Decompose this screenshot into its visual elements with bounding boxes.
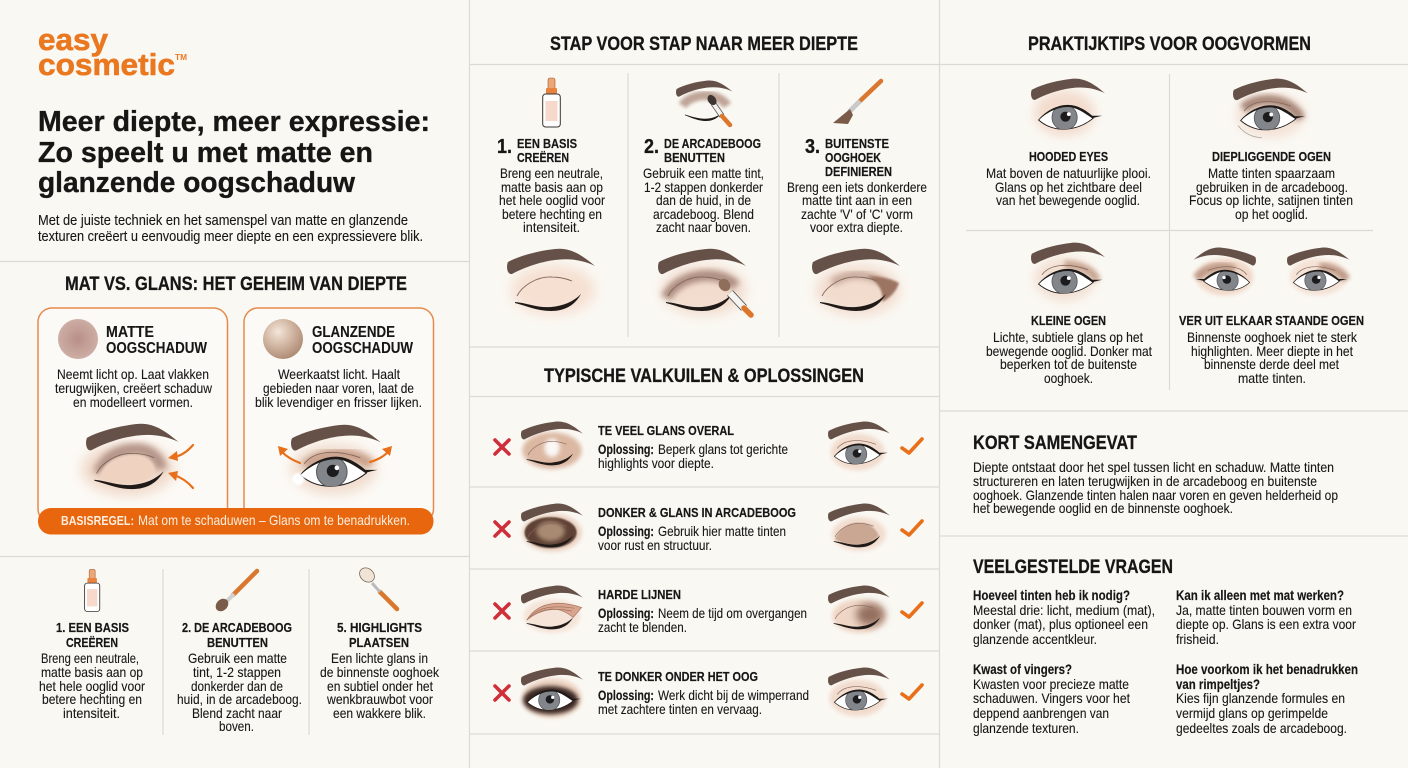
step heading: 1. EEN BASIS (56, 620, 129, 635)
faq: alleen mat (1176, 588, 1356, 647)
step: arcadeboog (177, 571, 302, 734)
card text: gloss (255, 366, 422, 410)
row text: Oplossing: (598, 524, 654, 539)
step text: de binnenste ooghoek (320, 664, 440, 680)
tip text: hooded (986, 149, 1151, 208)
eye: soft blend (828, 586, 890, 633)
row text: Oplossing: (598, 606, 654, 621)
logo: cosmetic (38, 47, 175, 82)
eye: wide set left (1194, 248, 1256, 295)
heading: valkuilen: TYPISCHE VALKUILEN & OPLOSSINGEN (544, 365, 864, 387)
tip text: deep set: op het ooglid. (1235, 206, 1308, 222)
cross (495, 686, 509, 700)
logo (38, 22, 187, 82)
step 1 text: intensiteit. (523, 219, 580, 235)
panel: kort samengevat (973, 432, 1338, 516)
faq: tinten: glanzende accentkleur. (973, 631, 1097, 647)
step 3 (787, 81, 927, 315)
logo: TM (175, 53, 187, 62)
step text (320, 650, 440, 721)
arrow: gloss right (370, 446, 392, 462)
step text: huid, in de arcadeboog. (177, 691, 302, 707)
card text: gloss: blik levendiger en frisser lijken. (255, 394, 422, 410)
panel: stap voor stap (497, 33, 927, 337)
card text: matte (55, 366, 213, 410)
step 2 heading: BENUTTEN (664, 150, 725, 165)
tip: ver uit elkaar (1179, 248, 1364, 386)
eye: too much gloss (521, 422, 583, 469)
eye: small (1031, 243, 1105, 301)
faq: alleen mat: frisheid. (1176, 631, 1219, 647)
row text: voor rust en structuur. (598, 537, 712, 553)
arrow: matte lower (168, 471, 193, 488)
step text: boven. (219, 718, 254, 734)
step text: betere hechting en (42, 691, 142, 707)
tip text: hooded: van het bewegende ooglid. (996, 192, 1140, 208)
card: glanzende oogschaduw (244, 308, 434, 523)
tip text: deep set: Matte tinten spaarzaam (1208, 165, 1335, 181)
tip text: small: beperken tot de buitenste (1000, 356, 1137, 372)
card heading: gloss: GLANZENDE (312, 324, 395, 341)
eye: matte beige (828, 504, 890, 551)
step heading: BENUTTEN (207, 635, 268, 650)
step 2 text: arcadeboog. Blend (653, 206, 754, 222)
card text: gloss: gebieden naar voren, laat de (263, 380, 414, 396)
summary text: Diepte ontstaat door het spel tussen licht en schaduw. Matte tinten (973, 459, 1334, 475)
card: matte oogschaduw (38, 308, 228, 523)
step heading: CREËREN (66, 635, 118, 650)
faq: alleen mat: Kan ik alleen met mat werken? (1176, 588, 1344, 603)
step: basis (39, 569, 145, 721)
tip text: small: Lichte, subtiele glans op het (993, 329, 1143, 345)
illustration: base eye (507, 249, 595, 315)
step 3 heading: OOGHOEK (825, 150, 881, 165)
summary text (973, 459, 1338, 516)
step 3 text (787, 179, 927, 235)
faq: kwast: Kwast of vingers? (973, 662, 1072, 677)
summary text: ooghoek. Glanzende tinten halen naar voren en geven helderheid op (973, 487, 1338, 503)
faq: kwast: schaduwen. Vingers voor het (973, 690, 1130, 706)
step 1 text (499, 165, 605, 235)
step 3 text: Breng een iets donkerdere (787, 179, 927, 195)
title: Zo speelt u met matte en (38, 137, 373, 169)
faq: kwast: Kwasten voor precieze matte (973, 676, 1129, 692)
step heading (337, 620, 422, 650)
row: te veel glans (495, 422, 922, 471)
faq: rimpeltjes: vermijd glans op gerimpelde (1176, 705, 1328, 721)
step heading (56, 620, 129, 650)
faq: rimpeltjes: gedeeltes zoals de arcadeboog. (1176, 720, 1347, 736)
eye: corrected gloss (828, 422, 890, 470)
eye: hooded (1031, 79, 1105, 136)
card heading: gloss: OOGSCHADUW (312, 340, 413, 357)
step heading: PLAATSEN (349, 635, 409, 650)
step 1 heading: 1. (497, 136, 512, 158)
card heading: matte (106, 324, 207, 357)
eye: too dark under (521, 668, 583, 718)
step 2 text: 1-2 stappen donkerder (644, 179, 763, 195)
tip text: wide set: highlighten. Meer diepte in het (1191, 343, 1353, 359)
step 2 heading (644, 136, 761, 165)
tip: kleine ogen (986, 243, 1152, 386)
card text: matte: Neemt licht op. Laat vlakken (57, 366, 209, 382)
arrow: gloss left (278, 446, 300, 463)
faq: tinten: Hoeveel tinten heb ik nodig? (973, 588, 1130, 603)
check (902, 685, 922, 699)
row text (598, 505, 796, 553)
row: donker en glans (495, 504, 922, 553)
row text: Beperk glans tot gerichte (658, 441, 788, 457)
tip text: hooded: Mat boven de natuurlijke plooi. (986, 165, 1151, 181)
panel: mat vs glans (38, 273, 434, 534)
row text (598, 587, 807, 635)
rule bar: BASISREGEL: (61, 513, 134, 528)
step text: donkerder dan de (191, 678, 283, 694)
step text: en subtiel onder het (327, 678, 433, 694)
card heading: matte: OOGSCHADUW (106, 340, 207, 357)
illustration: matte eye (82, 424, 193, 495)
icon: bottle (543, 78, 560, 127)
tip text: wide set: binnenste derde deel met (1204, 356, 1339, 372)
card heading: gloss (312, 324, 413, 357)
step 3 heading (805, 136, 892, 179)
icon: fan brush (357, 565, 397, 609)
intro text: texturen creëert u eenvoudig meer diepte en een expressievere blik. (38, 228, 423, 245)
cross (495, 604, 509, 618)
step 3 heading: 3. (805, 136, 820, 158)
panel: valkuilen (495, 365, 922, 718)
title: glanzende oogschaduw (38, 167, 356, 199)
title: Meer diepte, meer expressie: (38, 106, 430, 138)
step heading: 5. HIGHLIGHTS (337, 620, 422, 635)
step 1 heading: CREËREN (517, 150, 569, 165)
row text: Oplossing: (598, 688, 654, 703)
faq: alleen mat: diepte op. Glans is een extra voor (1176, 616, 1356, 632)
intro text: Met de juiste techniek en het samenspel van matte en glanzende (38, 212, 408, 229)
eye: soft under (828, 668, 890, 716)
row text: highlights voor diepte. (598, 455, 714, 471)
tip: diepliggend (1189, 79, 1353, 222)
row text: Neem de tijd om overgangen (658, 605, 807, 621)
step: highlights (320, 565, 440, 721)
step text (177, 650, 302, 734)
row text: zacht te blenden. (598, 619, 687, 635)
summary text: structureren en laten terugwijken in de arcadeboog en buitenste (973, 473, 1317, 489)
tip text: deep set: DIEPLIGGENDE OGEN (1212, 149, 1331, 164)
arrow: matte upper (168, 445, 193, 461)
row text: Werk dicht bij de wimperrand (658, 687, 809, 703)
illustration: crease eye (658, 249, 751, 315)
step 2 text: Gebruik een matte tint, (643, 165, 764, 181)
heading: mat vs glans: MAT VS. GLANS: HET GEHEIM VAN DIEPTE (65, 273, 407, 295)
tip text: deep set: gebruiken in de arcadeboog. (1196, 179, 1348, 195)
faq: tinten: Meestal drie: licht, medium (mat), (973, 602, 1155, 618)
card heading: matte: MATTE (106, 324, 154, 341)
check (902, 521, 922, 535)
step 1 heading: EEN BASIS (517, 136, 577, 151)
row text: Gebruik hier matte tinten (658, 523, 786, 539)
step text: een wakkere blik. (333, 705, 426, 721)
step text: matte basis aan op (41, 664, 143, 680)
tip text: deep set: Focus op lichte, satijnen tinten (1189, 192, 1353, 208)
step text: Blend zacht naar (192, 705, 282, 721)
row text: DONKER & GLANS IN ARCADEBOOG (598, 505, 796, 520)
tip text: wide set: matte tinten. (1238, 370, 1306, 386)
step 3 text: matte tint aan in een (802, 192, 912, 208)
row text: HARDE LIJNEN (598, 587, 681, 602)
icon: eye with applicator (676, 80, 732, 125)
cross (495, 440, 509, 454)
row text: met zachtere tinten en vervaag. (598, 701, 762, 717)
rule bar: Mat om te schaduwen – Glans om te benadrukken. (138, 512, 410, 528)
step 3 text: voor extra diepte. (810, 219, 903, 235)
step text: het hele ooglid voor (39, 678, 145, 694)
step 2 heading: 2. (644, 136, 659, 158)
illustration: outer V eye (812, 249, 900, 315)
step text: Breng een neutrale, (41, 650, 139, 666)
icon: bottle (85, 569, 100, 612)
row text (598, 423, 788, 471)
faq: kwast: deppend aanbrengen van (973, 705, 1109, 721)
faq: alleen mat: Ja, matte tinten bouwen vorm en (1176, 602, 1352, 618)
faq: tinten: donker (mat), plus optioneel een (973, 616, 1148, 632)
step 1 text: matte basis aan op (501, 179, 603, 195)
step 1 text: Breng een neutrale, (500, 165, 603, 181)
tip text: wide set: VER UIT ELKAAR STAANDE OGEN (1179, 313, 1364, 328)
tip text: wide set: Binnenste ooghoek niet te sterk (1187, 329, 1358, 345)
step 3 heading: BUITENSTE (825, 136, 889, 151)
faq: rimpeltjes: Kies fijn glanzende formules en (1176, 690, 1345, 706)
illustration: gloss eye (278, 425, 392, 494)
eye: wide set right (1287, 248, 1349, 295)
tip text: deep set (1189, 149, 1353, 222)
step 1 (497, 78, 605, 315)
check (902, 439, 922, 453)
faq: rimpeltjes (1176, 662, 1358, 736)
eye: deep set (1233, 79, 1308, 138)
tip text: hooded: Glans op het zichtbare deel (995, 179, 1142, 195)
card text: matte: terugwijken, creëert schaduw (55, 380, 213, 396)
step 2 text (643, 165, 764, 235)
panel: praktijktips (966, 33, 1373, 390)
icon: brush (213, 571, 257, 614)
logo: easy (38, 22, 109, 57)
step 1 text: het hele ooglid voor (499, 192, 605, 208)
step 2 heading: DE ARCADEBOOG (664, 136, 761, 151)
step 1 text: betere hechting en (502, 206, 602, 222)
title (38, 106, 430, 199)
tip text: small: ooghoek. (1044, 370, 1093, 386)
faq: kwast: glanzende texturen. (973, 720, 1079, 736)
rule bar (38, 508, 434, 534)
step text: Een lichte glans in (331, 650, 428, 666)
step text (39, 650, 145, 721)
card text: gloss: Weerkaatst licht. Haalt (278, 366, 400, 382)
swatch: gloss (263, 319, 303, 359)
heading: samenvatting: KORT SAMENGEVAT (973, 432, 1137, 454)
step 2 text: zacht naar boven. (656, 219, 751, 235)
step 2 text: dan de huid, in de (656, 192, 751, 208)
row text: Oplossing: (598, 442, 654, 457)
faq: kwast (973, 662, 1130, 736)
step heading: 2. DE ARCADEBOOG (182, 620, 292, 635)
intro text (38, 212, 423, 245)
step 1 heading (497, 136, 577, 165)
eye: dark gloss (521, 504, 583, 552)
step text: intensiteit. (63, 705, 120, 721)
tip: hooded (986, 79, 1151, 208)
row: te donker (495, 668, 922, 718)
faq: rimpeltjes: van rimpeltjes? (1176, 677, 1260, 692)
step text: wenkbrauwbot voor (326, 691, 433, 707)
row text (598, 669, 809, 717)
step heading (182, 620, 292, 650)
icon: angled brush (833, 81, 881, 124)
row text: TE DONKER ONDER HET OOG (598, 669, 758, 684)
tip text: wide set (1179, 313, 1364, 386)
heading: praktijktips: PRAKTIJKTIPS VOOR OOGVORMEN (1028, 33, 1311, 55)
heading: stap voor stap: STAP VOOR STAP NAAR MEER DIEPTE (550, 33, 858, 55)
tip text: small (986, 313, 1152, 386)
step 3 heading: DEFINIEREN (825, 164, 892, 179)
panel: intro (38, 22, 430, 245)
summary text: het bewegende ooglid en de binnenste ooghoek. (973, 500, 1233, 516)
cross (495, 522, 509, 536)
check (902, 603, 922, 617)
step text: Gebruik een matte (188, 650, 287, 666)
step 3 text: zachte 'V' of 'C' vorm (801, 206, 913, 222)
row: harde lijnen (495, 586, 922, 635)
card text: matte: en modelleert vormen. (73, 394, 193, 410)
eye: hard lines (521, 586, 583, 633)
tip text: small: bewegende ooglid. Donker mat (986, 343, 1152, 359)
row text: TE VEEL GLANS OVERAL (598, 423, 734, 438)
heading: faq: VEELGESTELDE VRAGEN (973, 556, 1173, 578)
step text: tint, 1-2 stappen (193, 664, 281, 680)
faq: tinten (973, 588, 1155, 647)
panel: drie stappen links (39, 565, 440, 735)
tip text: hooded: HOODED EYES (1029, 149, 1108, 164)
panel: veelgestelde vragen (973, 556, 1358, 736)
faq: rimpeltjes: Hoe voorkom ik het benadrukken (1176, 662, 1358, 677)
step 2 (643, 80, 764, 315)
swatch: matte (58, 319, 98, 359)
tip text: small: KLEINE OGEN (1031, 313, 1106, 328)
